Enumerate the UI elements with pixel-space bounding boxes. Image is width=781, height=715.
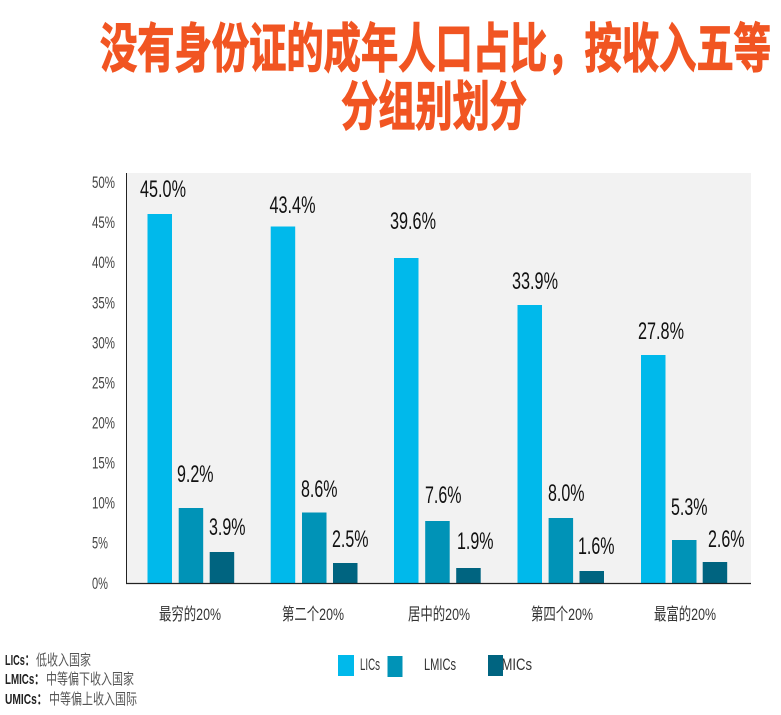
value labels: UMICs: 2.5% <box>332 526 368 553</box>
y axis labels: 15% <box>92 454 115 472</box>
legend <box>338 655 532 677</box>
value labels: LICs: 27.8% <box>638 318 684 345</box>
category labels: 最穷的20% <box>159 605 221 624</box>
category labels <box>159 605 716 624</box>
value labels: LMICs <box>177 461 708 521</box>
bars: UMICs <box>210 552 727 583</box>
bars: LICs <box>148 214 666 583</box>
category labels: 第四个20% <box>531 605 593 624</box>
title <box>100 20 771 137</box>
y axis labels: 10% <box>92 494 115 512</box>
value labels: UMICs <box>209 514 744 560</box>
legend: UMICs <box>492 655 532 674</box>
y axis labels <box>92 173 115 593</box>
income group notes: LMICs： <box>5 671 44 688</box>
income group notes: 中等偏下收入国家 <box>46 670 134 688</box>
income group notes: 中等偏上收入国际 <box>49 690 137 708</box>
value labels: UMICs: 2.6% <box>708 526 744 553</box>
title: 分组别划分 <box>341 78 527 137</box>
legend: LMICs <box>424 655 456 674</box>
value labels: LMICs: 9.2% <box>177 461 214 488</box>
category labels: 居中的20% <box>408 605 470 624</box>
value labels: LICs: 45.0% <box>140 176 186 203</box>
axes <box>126 173 751 584</box>
value labels: LMICs: 7.6% <box>425 482 462 509</box>
value labels: LICs: 43.4% <box>270 192 316 219</box>
y axis labels: 35% <box>92 294 115 312</box>
bars: LMICs <box>179 508 696 583</box>
value labels: UMICs: 3.9% <box>209 514 246 541</box>
income group notes: LICs： <box>5 652 34 669</box>
y axis labels: 45% <box>92 213 115 232</box>
y axis labels: 30% <box>92 334 115 352</box>
y axis labels: 40% <box>92 253 115 272</box>
category labels: 最富的20% <box>654 605 716 624</box>
value labels: LMICs: 5.3% <box>671 494 708 521</box>
value labels: LMICs: 8.0% <box>548 480 584 507</box>
value labels: UMICs: 1.9% <box>457 528 494 555</box>
value labels: UMICs: 1.6% <box>578 533 614 560</box>
income group notes: UMICs： <box>5 691 47 708</box>
category labels: 第二个20% <box>282 605 344 624</box>
y axis labels: 25% <box>92 374 115 392</box>
panel: plot background <box>127 173 751 583</box>
legend: LICs <box>360 655 380 674</box>
y axis labels: 5% <box>92 534 108 553</box>
value labels: LMICs: 8.6% <box>301 476 338 503</box>
y axis labels: 20% <box>92 414 115 432</box>
y axis labels: 0% <box>92 574 108 593</box>
value labels: LICs: 39.6% <box>390 208 436 235</box>
income group notes: 低收入国家 <box>36 652 91 669</box>
value labels: LICs <box>140 176 684 345</box>
y axis labels: 50% <box>92 173 115 192</box>
value labels: LICs: 33.9% <box>512 268 558 295</box>
income group notes <box>5 652 137 708</box>
